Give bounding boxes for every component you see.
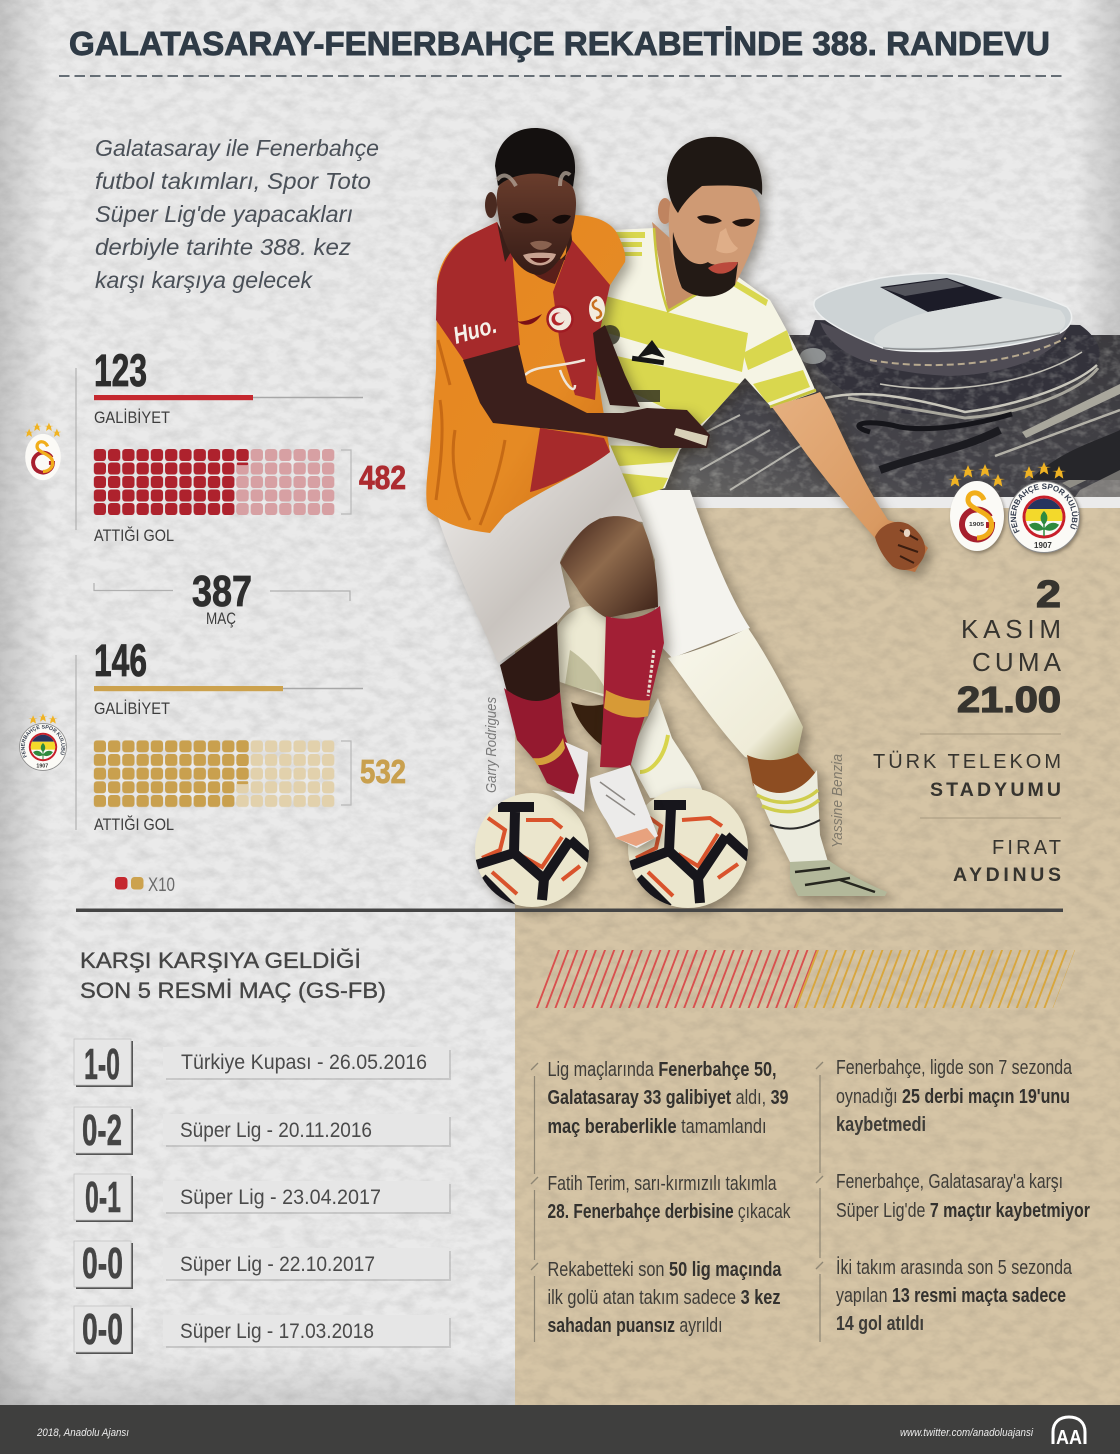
match info: AYDINUS bbox=[953, 864, 1061, 886]
player: Garry Rodrigues bbox=[426, 128, 710, 848]
fact 3: sahadan puansız ayrıldı bbox=[548, 1315, 723, 1337]
intro text: futbol takımları, Spor Toto bbox=[95, 168, 371, 194]
goals number: 532 bbox=[360, 753, 406, 790]
facts column right bbox=[836, 1057, 1090, 1335]
Fenerbahçe statistics block bbox=[19, 635, 406, 834]
wins label: GALİBİYET bbox=[94, 699, 170, 718]
credit: Yassine Benzia: Yassine Benzia bbox=[830, 754, 846, 848]
hatch stripes red and gold bbox=[547, 950, 1064, 1008]
match info: FIRAT bbox=[992, 837, 1061, 859]
stadium photo banner bbox=[640, 273, 1120, 497]
wins bar bbox=[94, 686, 363, 691]
fact 4: kaybetmedi bbox=[836, 1114, 926, 1136]
fact 2 bbox=[548, 1173, 791, 1223]
match list bbox=[74, 1039, 451, 1354]
match row 4 bbox=[74, 1239, 451, 1289]
goals number: 482 bbox=[359, 459, 406, 496]
match info: 21.00 bbox=[957, 679, 1061, 720]
Fenerbahçe wins number: 146 bbox=[94, 635, 147, 686]
total matches: 387 bbox=[192, 567, 252, 616]
footer bar: www.twitter.com/anadoluajansi bbox=[900, 1427, 1033, 1439]
fact 3: Rekabetteki son 50 lig maçında bbox=[548, 1259, 782, 1281]
wins label: GALİBİYET bbox=[94, 408, 170, 427]
intro text: Süper Lig'de yapacakları bbox=[95, 201, 353, 227]
total matches: MAÇ bbox=[206, 609, 236, 628]
far arm bbox=[593, 325, 640, 407]
fact 1: Lig maçlarında Fenerbahçe 50, bbox=[548, 1059, 776, 1081]
head bbox=[485, 128, 576, 275]
match info: CUMA bbox=[972, 647, 1062, 677]
right sock with band bbox=[600, 606, 664, 768]
back leg bbox=[553, 606, 704, 798]
match row 4: 0-0 bbox=[82, 1239, 123, 1288]
facts column left bbox=[531, 1059, 823, 1342]
wins bar bbox=[94, 395, 363, 400]
shirt folds bbox=[436, 340, 505, 525]
fact 4: oynadığı 25 derbi maçın 19'unu bbox=[836, 1086, 1070, 1108]
match row 2: Süper Lig - 20.11.2016 bbox=[180, 1119, 372, 1142]
shirt bbox=[590, 228, 816, 500]
fact 5 bbox=[836, 1171, 1090, 1222]
fact 2: 28. Fenerbahçe derbisine çıkacak bbox=[548, 1201, 791, 1223]
match row 4: Süper Lig - 22.10.2017 bbox=[180, 1253, 375, 1276]
fact 1: Galatasaray 33 galibiyet aldı, 39 bbox=[548, 1087, 788, 1109]
intro text: karşı karşıya gelecek bbox=[95, 267, 314, 293]
intro text: Galatasaray ile Fenerbahçe bbox=[95, 135, 379, 161]
Galatasaray wins number: 123 bbox=[94, 345, 147, 396]
heading: last five matches: SON 5 RESMİ MAÇ (GS-FB) bbox=[80, 978, 386, 1003]
match row 5: Süper Lig - 17.03.2018 bbox=[180, 1320, 374, 1343]
neck bbox=[652, 222, 735, 311]
total matches bbox=[94, 567, 350, 628]
fact 4 bbox=[836, 1057, 1073, 1136]
icon: Anadolu Agency logo bbox=[1053, 1417, 1085, 1449]
shirt details bbox=[450, 296, 605, 389]
right boot bbox=[590, 765, 658, 848]
shirt red panels bbox=[436, 222, 610, 492]
footer bar bbox=[0, 1405, 1120, 1454]
footer bar: 2018, Anadolu Ajansı bbox=[36, 1427, 129, 1439]
large Fenerbahçe crest: 1907 bbox=[1034, 541, 1052, 550]
match info bbox=[873, 574, 1062, 886]
goals waffle chart bbox=[94, 449, 335, 516]
match info: STADYUMU bbox=[930, 779, 1061, 801]
title: GALATASARAY-FENERBAHÇE REKABETİNDE 388. RANDEVU bbox=[69, 25, 1050, 62]
small Fenerbahçe crest: FENERBAHÇE SPOR KULÜBÜ bbox=[20, 724, 66, 758]
match row 2 bbox=[74, 1106, 451, 1155]
small Galatasaray crest bbox=[25, 423, 61, 480]
right arm and hand bbox=[772, 392, 928, 572]
fact 1: maç beraberlikle tamamlandı bbox=[548, 1116, 766, 1138]
goals waffle chart bbox=[94, 740, 335, 808]
fact 6: 14 gol atıldı bbox=[836, 1313, 924, 1335]
small Fenerbahçe crest: 1907 bbox=[36, 763, 48, 769]
credit: Garry Rodrigues: Garry Rodrigues bbox=[484, 697, 500, 793]
fact 3: ilk golü atan takım sadece 3 kez bbox=[548, 1287, 780, 1309]
fact 1 bbox=[548, 1059, 788, 1138]
goals label: ATTIĞI GOL bbox=[94, 526, 174, 545]
Galatasaray statistics block bbox=[25, 345, 406, 545]
large Galatasaray crest bbox=[948, 464, 1006, 553]
goals label: ATTIĞI GOL bbox=[94, 815, 174, 834]
match info: KASIM bbox=[961, 614, 1061, 644]
fact 6 bbox=[836, 1256, 1073, 1335]
fact 6: yapılan 13 resmi maçta sadece bbox=[836, 1285, 1066, 1307]
near arm and hand bbox=[463, 345, 710, 448]
large Fenerbahçe crest bbox=[1008, 462, 1084, 557]
shorts bbox=[437, 445, 643, 663]
shorts bbox=[615, 490, 750, 658]
fact 3 bbox=[548, 1259, 782, 1337]
match row 5 bbox=[74, 1305, 451, 1354]
intro text: derbiyle tarihte 388. kez bbox=[95, 234, 352, 260]
small Fenerbahçe crest bbox=[19, 714, 67, 771]
legend bbox=[115, 875, 175, 896]
player: Yassine Benzia bbox=[553, 137, 928, 896]
match row 1: 1-0 bbox=[84, 1040, 120, 1089]
match row 5: 0-0 bbox=[82, 1305, 123, 1354]
match balls bbox=[475, 788, 750, 908]
shirt body bbox=[426, 215, 625, 533]
match row 1: Türkiye Kupası - 26.05.2016 bbox=[181, 1051, 427, 1074]
legend: X10 bbox=[148, 875, 175, 896]
large Galatasaray crest: 1905 bbox=[969, 522, 984, 528]
shirt details: Huo. bbox=[450, 312, 500, 350]
left lower leg and sock bbox=[500, 622, 588, 812]
adidas mark bbox=[637, 340, 665, 358]
large Fenerbahçe crest: FENERBAHÇE SPOR KULÜBÜ bbox=[1010, 484, 1079, 534]
match row 3: 0-1 bbox=[85, 1173, 121, 1222]
fact 5: Fenerbahçe, Galatasaray'a karşı bbox=[836, 1171, 1063, 1193]
lower leg bbox=[747, 753, 887, 896]
fact 2: Fatih Terim, sarı-kırmızılı takımla bbox=[548, 1173, 777, 1195]
head bbox=[658, 137, 762, 297]
heading: last five matches bbox=[80, 948, 386, 1003]
ball right bbox=[628, 788, 750, 908]
match row 3 bbox=[74, 1173, 451, 1222]
match row 1 bbox=[74, 1039, 451, 1089]
white band under banner bbox=[515, 497, 1120, 508]
heading: last five matches: KARŞI KARŞIYA GELDİĞİ bbox=[80, 948, 361, 973]
icon: Anadolu Agency logo: AA bbox=[1056, 1427, 1082, 1449]
intro text bbox=[95, 135, 379, 293]
right thigh and knee bbox=[560, 516, 658, 618]
match info: TÜRK TELEKOM bbox=[873, 751, 1061, 773]
right thigh and knee bbox=[668, 628, 803, 761]
match row 2: 0-2 bbox=[82, 1106, 122, 1155]
ball left bbox=[475, 793, 592, 908]
match info: 2 bbox=[1036, 574, 1061, 616]
match row 3: Süper Lig - 23.04.2017 bbox=[180, 1186, 381, 1209]
